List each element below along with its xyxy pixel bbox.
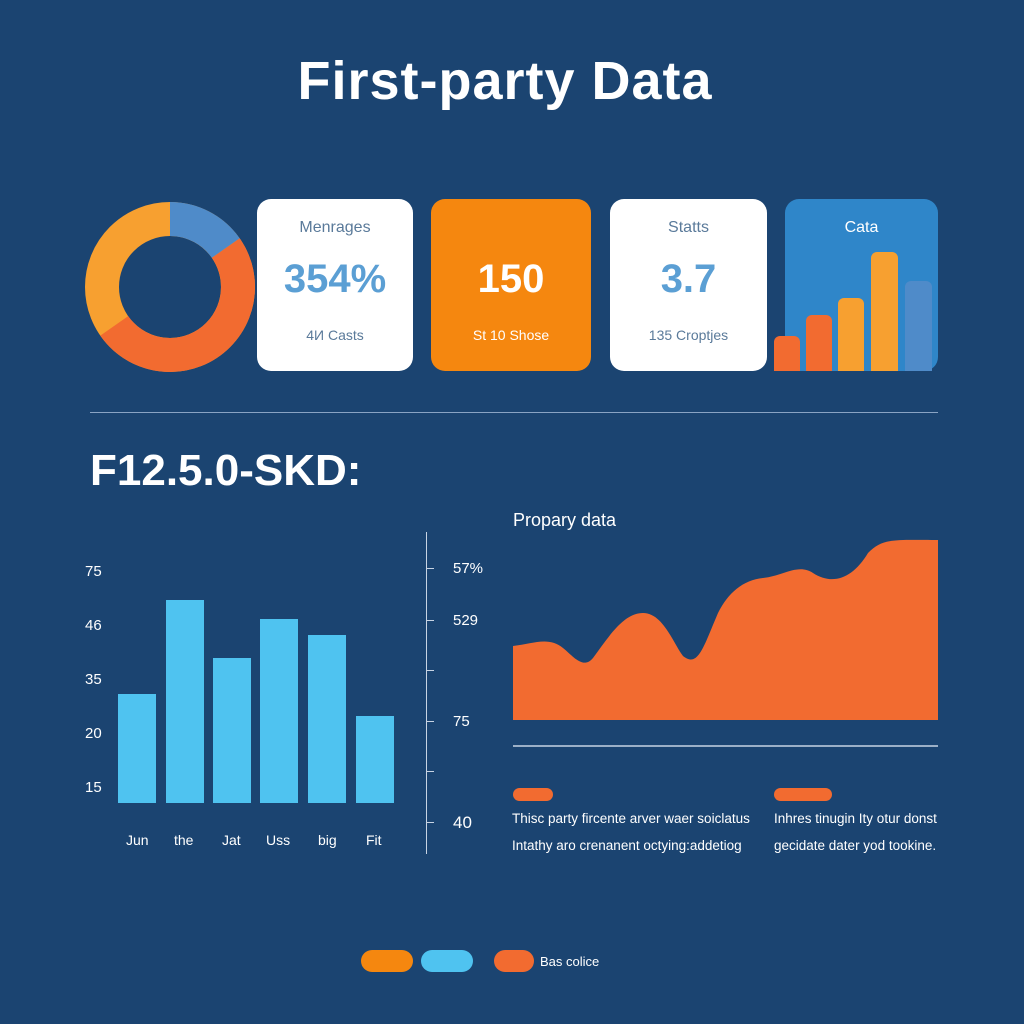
legend descriptions: Intathy aro crenanent octying:addetiog [512, 838, 742, 853]
card: Statts [610, 199, 767, 371]
card: 150 [431, 199, 591, 371]
card: Statts: Statts [668, 219, 709, 236]
area chart [513, 510, 938, 747]
card: Menrages [257, 199, 413, 371]
bar chart: 57% [453, 560, 483, 577]
card: 150: 150 [478, 257, 544, 301]
area chart: Propary data [513, 510, 616, 530]
bar chart: 75 [85, 563, 102, 580]
legend descriptions: Inhres tinugin Ity otur donst [774, 811, 937, 826]
bar chart: the [174, 832, 193, 848]
bar chart [85, 532, 483, 854]
legend descriptions: gecidate dater yod tookine. [774, 838, 936, 853]
card: Menrages: 4И Casts [306, 327, 364, 343]
bar chart: 46 [85, 617, 102, 634]
card: Menrages: Menrages [299, 219, 371, 236]
bar chart: 35 [85, 671, 102, 688]
bar chart: Fit [366, 832, 382, 848]
card: Cata bars: Cata [845, 219, 878, 236]
bar chart: Uss [266, 832, 290, 848]
bar chart: 529 [453, 612, 478, 629]
bar chart: 20 [85, 725, 102, 742]
section heading: F12.5.0-SKD: [90, 446, 361, 495]
bar chart: Jun [126, 832, 149, 848]
bar chart: 15 [85, 779, 102, 796]
legend descriptions: Thisc party fircente arver waer soiclatus [512, 811, 750, 826]
title: First-party Data [297, 51, 713, 111]
bar chart: 40 [453, 813, 472, 832]
card: Menrages: 354% [284, 257, 386, 301]
bottom legend [361, 950, 599, 972]
bar chart: Jat [222, 832, 241, 848]
donut chart [85, 202, 255, 372]
bar chart: big [318, 832, 337, 848]
bottom legend: Bas colice [540, 954, 599, 969]
card: 150: St 10 Shose [473, 327, 549, 343]
legend descriptions [512, 788, 937, 853]
card: Statts: 135 Croptjes [649, 327, 728, 343]
card: Cata bars [774, 199, 938, 371]
card: Statts: 3.7 [661, 257, 716, 301]
bar chart: 75 [453, 713, 470, 730]
